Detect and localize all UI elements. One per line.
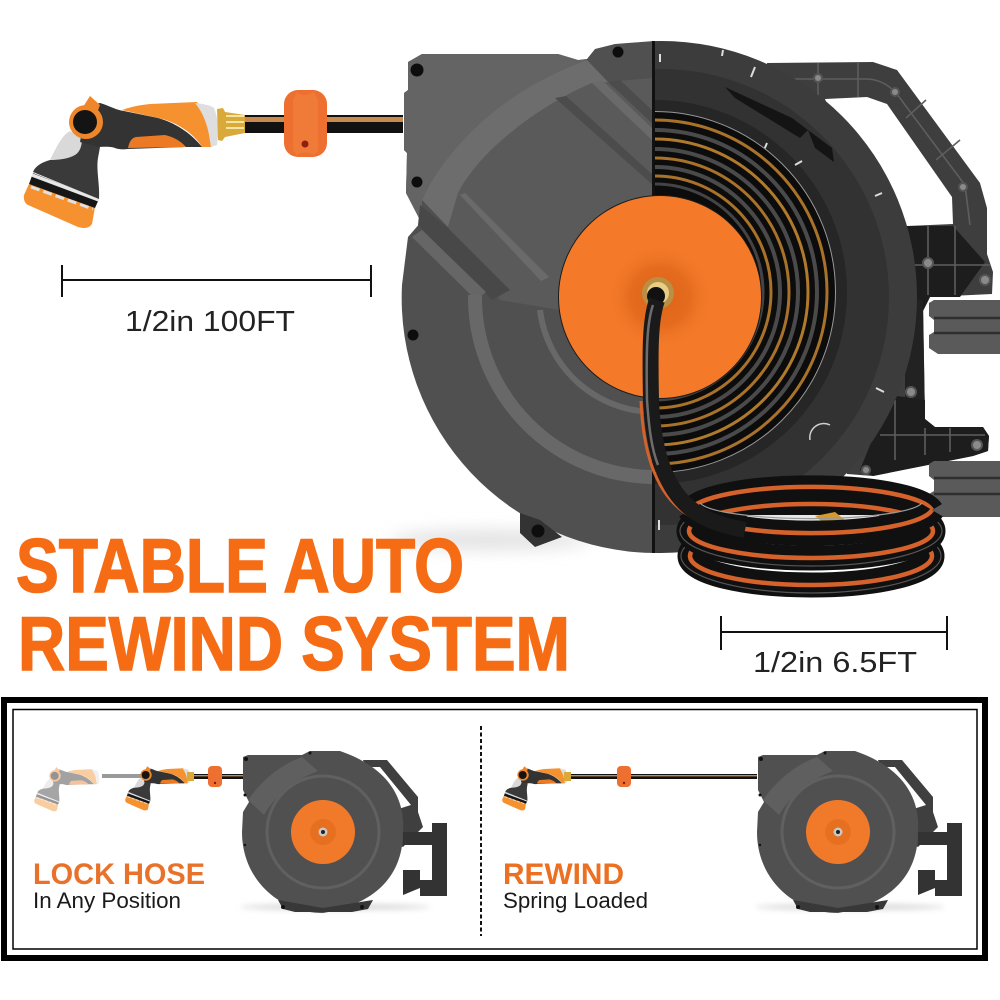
stopper [617, 766, 631, 787]
reel [240, 751, 447, 913]
hose [187, 772, 243, 781]
dark slots [725, 87, 834, 162]
faded hose segment [102, 774, 142, 778]
bracket ribs [780, 62, 990, 460]
extended hose [245, 115, 403, 133]
coiled hose length [680, 487, 942, 593]
caption: Spring Loaded [503, 888, 648, 913]
nozzle [125, 766, 190, 810]
wall mount upper [929, 300, 1000, 354]
bottom panel frame [4, 700, 985, 958]
reel [755, 751, 962, 913]
bolts [814, 74, 990, 474]
wall mount lower [929, 461, 1000, 517]
brass fitting [642, 277, 674, 309]
stopper [208, 766, 222, 787]
coiled hose [655, 111, 836, 473]
dimension: hose 100ft: 1/2in 100FT [125, 306, 295, 338]
main headline [16, 524, 570, 687]
panel: rewind [502, 751, 962, 913]
heading: REWIND [503, 858, 624, 891]
bracket rib panel side [905, 297, 925, 420]
brass connector [217, 108, 245, 141]
caption: In Any Position [33, 888, 181, 913]
main reel product [402, 41, 1000, 553]
hose stopper [284, 90, 327, 157]
concentric rings [475, 295, 654, 477]
diagonal strips [555, 96, 654, 186]
centre split line [652, 41, 655, 553]
orange hub disc [558, 195, 762, 399]
housing foot [520, 513, 562, 547]
spray nozzle [24, 96, 218, 228]
main headline: STABLE AUTO [16, 524, 464, 609]
panel: lock hose [33, 751, 447, 913]
panel divider [480, 726, 482, 936]
dimension: hose 6.5ft: 1/2in 6.5FT [753, 647, 917, 679]
faded nozzle position [34, 767, 99, 811]
housing left half [402, 41, 654, 553]
hole contents [745, 515, 880, 525]
tick marks [659, 50, 884, 530]
top corner [404, 54, 587, 222]
bracket rib panel lower [860, 395, 989, 476]
nozzle [502, 766, 567, 810]
heading: LOCK HOSE [33, 858, 205, 891]
dimension: hose 6.5ft [721, 616, 947, 679]
bracket rib panel upper [905, 226, 985, 311]
cross-section right half [655, 41, 917, 553]
dimension: hose 100ft [62, 265, 371, 338]
screw holes [408, 46, 624, 340]
main headline: REWIND SYSTEM [18, 602, 570, 687]
hose from hub to coil [641, 300, 745, 530]
interior panel [448, 78, 654, 310]
light curved band [422, 60, 608, 227]
wall bracket handle [767, 62, 993, 476]
floor shadow [390, 530, 590, 550]
hose [564, 772, 757, 781]
